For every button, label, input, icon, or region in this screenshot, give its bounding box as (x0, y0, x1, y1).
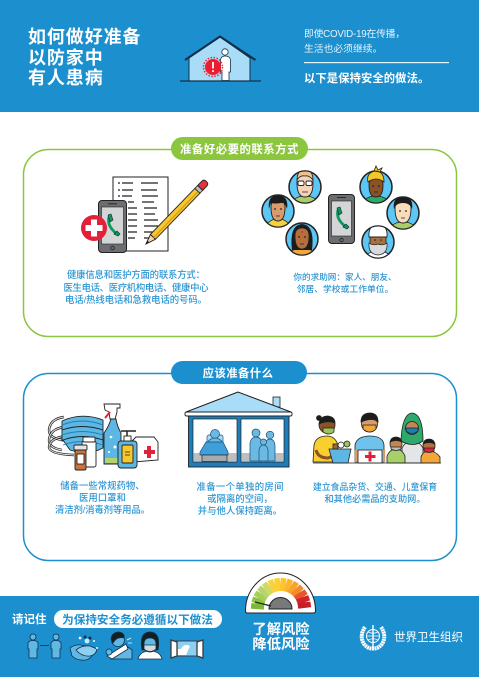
text block: contact details (64, 269, 209, 305)
text block: support network: 邻居、学校或工作单位。 (297, 283, 393, 294)
icon: first aid box (132, 437, 158, 462)
text block: supplies: 储备一些常规药物、 (60, 480, 145, 491)
icon: pencil (143, 179, 209, 246)
text block: separate room (196, 481, 284, 516)
icon: face masks (49, 416, 103, 455)
callout: follow the measures (54, 610, 222, 628)
text: know the risk, lower the risk: 降低风险 (252, 635, 310, 653)
person: woman with basket (313, 416, 351, 463)
person: man with red cross sign (355, 413, 384, 463)
icon: family (250, 429, 275, 461)
icon: risk gauge (246, 573, 316, 613)
person: child right (421, 439, 440, 463)
logo: World Health Organization (362, 625, 463, 649)
panel: contacts (24, 137, 456, 336)
text block: contact details: 医生电话、医疗机构电话、健康中心 (64, 282, 209, 293)
text block: supplies: 清洁剂/消毒剂等用品。 (55, 504, 150, 515)
text block: support network needs: 和其他必需品的支助网。 (324, 493, 426, 504)
icon: spray bottle (104, 404, 121, 464)
intro text (304, 27, 449, 85)
icon: open window (171, 640, 203, 658)
person: woman in green hijab (401, 413, 423, 463)
text block: contact details: 电话/热线电话和急救电话的号码。 (65, 294, 207, 305)
portrait: woman with bindi (286, 223, 318, 256)
text block: contact details: 健康信息和医护方面的联系方式： (67, 269, 205, 280)
heading: what to prepare: 应该准备什么 (203, 366, 273, 380)
text: know the risk, lower the risk: 了解风险 (252, 620, 310, 638)
text block: support network needs: 建立食品杂货、交通、儿童保育 (313, 481, 437, 492)
icon: wearing a mask (138, 632, 162, 659)
header band (0, 0, 479, 112)
title: 有人患病 (28, 67, 104, 88)
icon: physical distancing (28, 634, 61, 658)
panel: what to prepare (24, 361, 456, 560)
icon: hand washing (70, 636, 98, 660)
icon: cough into elbow (106, 632, 132, 659)
portrait: man with dark hair (262, 195, 294, 228)
icon: support network portraits around phone (262, 166, 419, 259)
title: 以防家中 (28, 47, 104, 68)
heading: contacts (171, 137, 308, 160)
intro text: 生活也必须继续。 (304, 42, 382, 55)
icon: contact list, phone and pencil (81, 177, 209, 252)
portrait: man with glasses (289, 170, 321, 204)
icon: medical supplies (49, 404, 158, 470)
intro text: 以下是保持安全的做法。 (304, 71, 429, 85)
label: remember: 请记住 (12, 612, 47, 626)
person: child left (387, 437, 405, 463)
title: 如何做好准备 (28, 27, 141, 47)
icon: red cross (81, 215, 107, 241)
text block: support network (293, 271, 397, 294)
portrait: man with short hair (387, 197, 419, 230)
icon: support people group (313, 413, 441, 463)
text block: support network needs (313, 481, 437, 504)
heading: what to prepare (171, 361, 307, 384)
text block: separate room: 并与他人保持距离。 (198, 505, 282, 516)
footer band (0, 573, 479, 677)
icon: phone centre (328, 194, 354, 244)
intro text: 即使COVID-19在传播， (304, 27, 405, 40)
icon: person in bed (200, 430, 228, 462)
text block: support network: 你的求助网：家人、朋友、 (293, 271, 397, 282)
icon: house with infected person (180, 36, 261, 81)
text block: supplies: 医用口罩和 (79, 492, 126, 503)
callout: follow the measures: 为保持安全务必遵循以下做法 (62, 612, 213, 626)
title (28, 27, 141, 88)
text: know the risk, lower the risk (252, 620, 310, 653)
portrait: woman with headwrap (360, 166, 392, 204)
text block: supplies (55, 480, 150, 515)
icon: hand gel (118, 431, 137, 468)
portrait: older man with beard (362, 225, 394, 259)
text block: separate room: 或隔离的空间， (207, 493, 273, 504)
icon: phone (98, 200, 126, 252)
icon: house with separate rooms (185, 392, 292, 467)
heading: contacts: 准备好必要的联系方式 (180, 142, 299, 156)
text block: separate room: 准备一个单独的房间 (196, 481, 284, 492)
icon: pill bottles (74, 437, 96, 470)
logo: World Health Organization: 世界卫生组织 (394, 630, 463, 644)
